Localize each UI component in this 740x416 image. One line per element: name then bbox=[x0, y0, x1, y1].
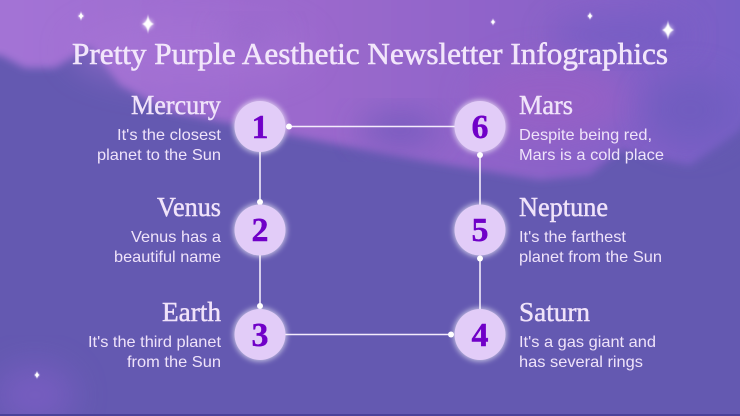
heading: Earth bbox=[162, 297, 221, 327]
number badge: 5 bbox=[472, 212, 488, 249]
description: from the Sun bbox=[127, 354, 221, 371]
item 2: Venus bbox=[114, 192, 286, 266]
number badge: 6 bbox=[472, 109, 488, 146]
heading: Mars bbox=[519, 90, 573, 120]
item 5: Neptune bbox=[454, 192, 662, 266]
description: beautiful name bbox=[114, 249, 221, 266]
description: planet from the Sun bbox=[519, 249, 662, 266]
number badge bbox=[454, 308, 506, 361]
star bbox=[78, 11, 84, 21]
star bbox=[34, 370, 40, 380]
description: Mars is a cold place bbox=[519, 147, 664, 164]
description: It's the third planet bbox=[88, 334, 222, 351]
number badge bbox=[454, 204, 506, 256]
star bbox=[587, 12, 593, 20]
description: It's the farthest bbox=[519, 229, 627, 246]
number badge: 2 bbox=[252, 212, 268, 249]
number badge bbox=[454, 100, 506, 153]
decorative stars bbox=[34, 11, 674, 380]
title: Pretty Purple Aesthetic Newsletter Infographics bbox=[72, 36, 668, 71]
item 4: Saturn bbox=[454, 297, 656, 371]
star bbox=[491, 18, 495, 26]
description: Venus has a bbox=[131, 229, 221, 246]
heading: Neptune bbox=[519, 192, 608, 222]
number badge bbox=[234, 100, 286, 153]
item 6: Mars bbox=[454, 90, 664, 164]
item 3: Earth bbox=[88, 297, 286, 371]
star bbox=[662, 20, 674, 40]
star bbox=[142, 14, 154, 34]
description: It's a gas giant and bbox=[519, 334, 656, 351]
description: It's the closest bbox=[117, 127, 222, 144]
heading: Venus bbox=[157, 192, 221, 222]
number badge: 4 bbox=[472, 317, 488, 354]
heading: Saturn bbox=[519, 297, 590, 327]
number badge: 1 bbox=[252, 109, 268, 146]
description: planet to the Sun bbox=[97, 147, 221, 164]
item 1: Mercury bbox=[97, 90, 286, 164]
description: Despite being red, bbox=[519, 127, 652, 144]
description: has several rings bbox=[519, 354, 643, 371]
number badge bbox=[234, 308, 286, 361]
number badge bbox=[234, 204, 286, 256]
heading: Mercury bbox=[131, 90, 221, 120]
connector lines bbox=[257, 124, 483, 338]
number badge: 3 bbox=[252, 317, 268, 354]
